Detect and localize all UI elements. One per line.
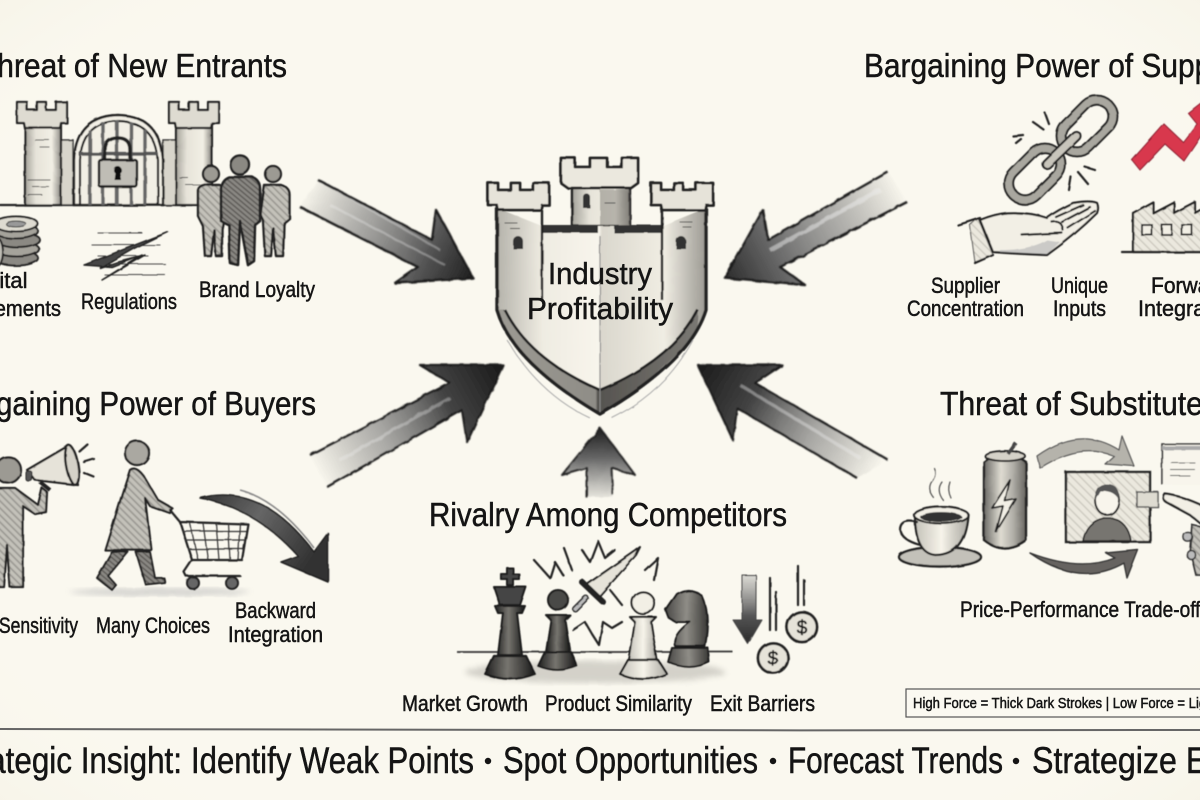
labels: buyer factors: Integration: [228, 622, 323, 647]
icon: open hand: [958, 202, 1098, 263]
labels: buyer factors: [0, 598, 323, 647]
force: threat of substitutes: [899, 385, 1200, 622]
labels: supplier factors: Unique: [1051, 273, 1108, 298]
icon: sword: [575, 547, 640, 609]
arrow: backward integration: [200, 490, 328, 582]
labels: supplier factors: Inputs: [1053, 296, 1106, 321]
icon: airplane in hand: [1164, 494, 1200, 575]
labels: rivalry factors: Market Growth: [402, 691, 528, 716]
legend: [906, 689, 1200, 717]
icon: castle gate with padlock: [0, 102, 219, 205]
chess: king: [485, 568, 535, 679]
central shield castle: industry profitability: [488, 158, 713, 418]
force: rivalry among competitors: [402, 496, 817, 716]
icon: video frame with person: [1066, 472, 1158, 542]
arrow: buyers to center: [310, 365, 503, 487]
labels: entry barriers: Regulations: [81, 289, 177, 314]
label: industry profitability: [527, 256, 673, 326]
labels: rivalry factors: Product Similarity: [545, 691, 692, 716]
icon: document: [1162, 444, 1200, 485]
icon: castle shield: [488, 158, 713, 418]
arrow: substitute cycle bottom: [1030, 550, 1138, 578]
icon: coffee cup: [899, 468, 981, 567]
icon: falling arrow and coins: [733, 566, 817, 673]
strategic insight footer: Spot Opportunities: [503, 740, 758, 781]
labels: supplier factors: Concentration: [907, 296, 1024, 321]
force: threat of new entrants: [0, 47, 315, 321]
heading: rivalry among competitors: Rivalry Among Competitors: [429, 496, 787, 533]
labels: supplier factors: [907, 273, 1200, 321]
icon: energy drink can: [984, 443, 1026, 548]
label: industry profitability: Profitability: [527, 291, 673, 326]
force: bargaining power of suppliers: [864, 47, 1200, 321]
arrow: rivalry to center: [562, 428, 635, 498]
bottom divider: [0, 729, 1200, 730]
strategic insight footer: [0, 740, 1200, 781]
arrow: substitutes to center: [698, 365, 888, 478]
icon: falling arrow and coins: $: [797, 618, 808, 639]
labels: buyer factors: Backward: [235, 598, 316, 623]
icon: clash sparks: [534, 541, 658, 645]
chess: dark pawn: [538, 590, 577, 670]
arrow: substitute cycle top: [1037, 436, 1134, 468]
labels: supplier factors: Supplier: [931, 273, 1000, 298]
icon: factory: [1122, 202, 1200, 252]
arrow: suppliers to center: [725, 172, 907, 285]
labels: entry barriers: [0, 268, 315, 321]
labels: rivalry factors: [402, 691, 815, 716]
icon: three customers: [198, 156, 290, 265]
icon: chain link: [1002, 93, 1120, 207]
labels: rivalry factors: Exit Barriers: [710, 691, 815, 716]
strategic insight footer: Identify Weak Points: [191, 740, 474, 781]
icon: falling arrow and coins: $: [768, 649, 779, 670]
arrow: new entrants to center: [300, 180, 473, 283]
icon: coin stack: [0, 216, 40, 266]
chess: white pawn: [620, 592, 667, 679]
force: bargaining power of buyers: [0, 385, 328, 647]
icon: chess pieces and sword: [457, 541, 733, 683]
icon: regulations crack: [84, 232, 168, 280]
icon: person with megaphone: [0, 444, 94, 587]
strategic insight footer: Forecast Trends: [788, 740, 1003, 781]
chess: knight: [666, 590, 709, 667]
label: industry profitability: Industry: [548, 256, 652, 291]
icon: shopper with cart: [70, 441, 250, 596]
icon: red rising arrow: [1132, 92, 1200, 170]
labels: entry barriers: Brand Loyalty: [199, 277, 315, 302]
labels: buyer factors: Many Choices: [96, 613, 210, 638]
